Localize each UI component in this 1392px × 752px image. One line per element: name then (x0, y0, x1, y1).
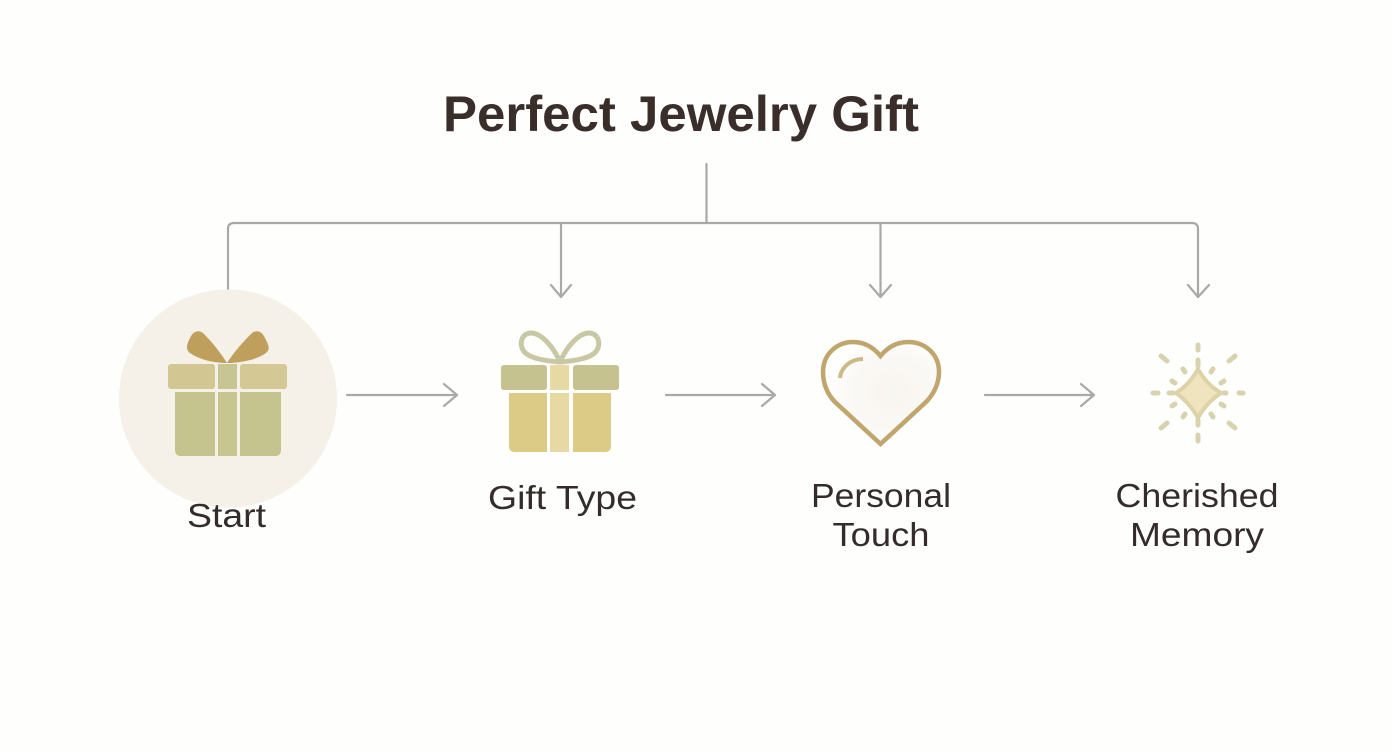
icon: outlined bow gift (501, 333, 619, 452)
label: Gift Type: Gift Type (488, 479, 637, 516)
label: Start: Start (187, 497, 266, 534)
label: Cherished Memory: Memory (1130, 516, 1265, 553)
start circle (119, 290, 337, 508)
icon: filled gift (168, 331, 287, 456)
label: Personal Touch: Personal (811, 477, 951, 514)
icon: sparkle (1153, 345, 1243, 441)
arrow: Start to Gift Type (347, 384, 457, 406)
label: Personal Touch: Touch (832, 516, 930, 553)
arrow: Gift Type to Personal Touch (666, 384, 775, 406)
icon: heart (823, 342, 939, 444)
arrow: Personal Touch to Cherished Memory (985, 384, 1094, 406)
step: Gift Type (488, 333, 637, 516)
arrow: down to Cherished Memory (1188, 229, 1209, 297)
title: Perfect Jewelry Gift (443, 86, 919, 142)
step: Cherished Memory (1116, 345, 1278, 553)
connector: title to horizontal branch (228, 164, 1198, 290)
arrow: down to Gift Type (551, 224, 571, 297)
label: Cherished Memory: Cherished (1116, 477, 1278, 514)
step: Start (119, 290, 337, 534)
arrow: down to Personal Touch (870, 224, 891, 297)
step: Personal Touch (811, 342, 951, 553)
